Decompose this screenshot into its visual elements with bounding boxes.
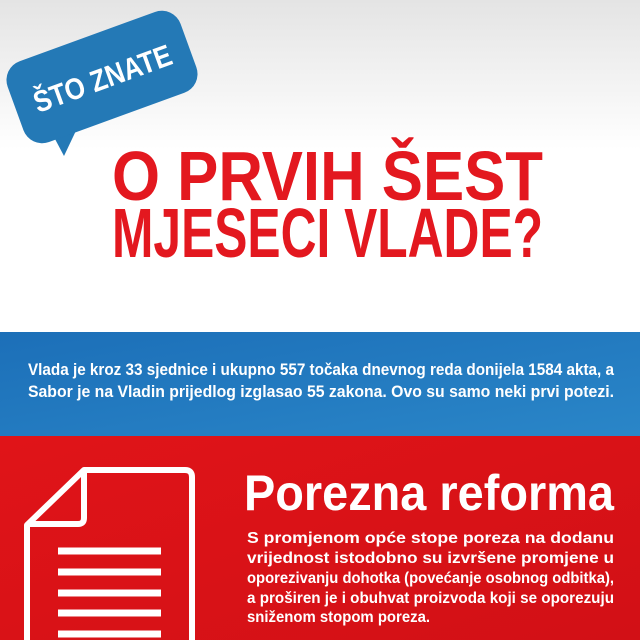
body text: a proširen je i obuhvat proizvoda koji se oporezuju <box>247 590 614 607</box>
speech bubble: ŠTO ZNATE: ŠTO ZNATE <box>29 38 177 120</box>
body text: S promjenom opće stope poreza na dodanu <box>247 530 614 547</box>
speech bubble: ŠTO ZNATE <box>1 5 203 156</box>
body text: oporezivanju dohotka (povećanje osobnog odbitka), <box>247 570 614 587</box>
icon: document <box>27 470 192 640</box>
body text: sniženom stopom poreza. <box>247 609 430 626</box>
heading: Porezna reforma <box>244 465 615 521</box>
title: O PRVIH ŠEST <box>112 136 543 215</box>
body text: vrijednost istodobno su izvršene promjene u <box>247 550 614 567</box>
title <box>112 136 543 272</box>
red panel: porezna reforma <box>0 436 640 640</box>
blue band intro text <box>0 332 640 436</box>
body text <box>247 530 614 626</box>
